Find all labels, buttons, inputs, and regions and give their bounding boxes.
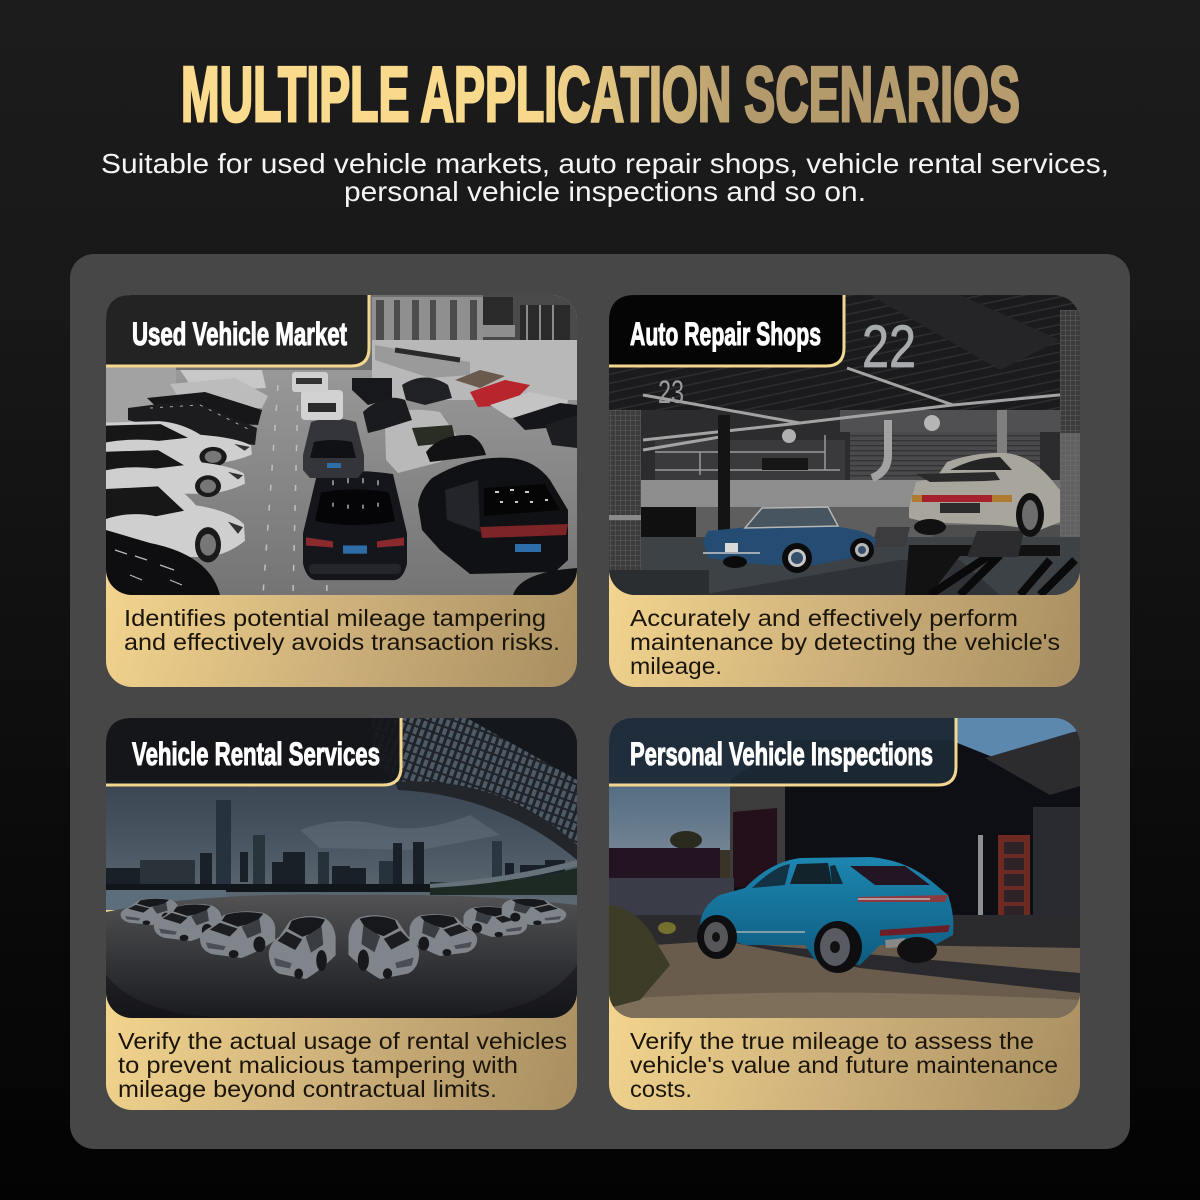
tab background <box>106 718 401 785</box>
description <box>124 605 560 655</box>
card: used vehicle market <box>106 295 577 687</box>
photo: blue SUV at house <box>609 718 1080 1018</box>
card: personal vehicle inspections <box>609 718 1080 1110</box>
subtitle: personal vehicle inspections and so on. <box>344 176 866 207</box>
photo: fleet and city skyline <box>106 718 577 1018</box>
subtitle: Suitable for used vehicle markets, auto repair shops, vehicle rental services, <box>101 148 1109 179</box>
description: to prevent malicious tampering with <box>118 1052 518 1078</box>
description: Accurately and effectively perform <box>630 605 1018 631</box>
description <box>118 1028 567 1102</box>
tab background <box>609 718 956 785</box>
description: mileage beyond contractual limits. <box>118 1076 497 1102</box>
card: vehicle rental services <box>106 718 577 1110</box>
heading: Auto Repair Shops <box>630 316 821 352</box>
description: vehicle's value and future maintenance <box>630 1052 1058 1078</box>
description <box>630 605 1060 679</box>
tab background <box>609 295 844 366</box>
description: Verify the actual usage of rental vehicles <box>118 1028 567 1054</box>
description: Verify the true mileage to assess the <box>630 1028 1034 1054</box>
tab outline <box>609 295 844 366</box>
subtitle <box>101 148 1109 207</box>
tab outline <box>106 295 369 366</box>
heading: Vehicle Rental Services <box>132 736 380 772</box>
neon number 22: 22 <box>862 313 916 380</box>
heading: Personal Vehicle Inspections <box>630 736 933 772</box>
tab outline <box>106 718 401 785</box>
tab background <box>106 295 369 366</box>
tab outline <box>609 718 956 785</box>
description: maintenance by detecting the vehicle's <box>630 629 1060 655</box>
description: mileage. <box>630 653 722 679</box>
photo: repair garage <box>609 295 1080 595</box>
description: costs. <box>630 1076 692 1102</box>
heading: Used Vehicle Market <box>132 316 347 352</box>
photo: car showroom <box>106 295 577 595</box>
description: and effectively avoids transaction risks. <box>124 629 560 655</box>
neon number 23: 23 <box>658 374 684 410</box>
description <box>630 1028 1058 1102</box>
card: auto repair shops <box>609 295 1080 687</box>
panel: application scenarios <box>70 254 1130 1149</box>
description: Identifies potential mileage tampering <box>124 605 546 631</box>
